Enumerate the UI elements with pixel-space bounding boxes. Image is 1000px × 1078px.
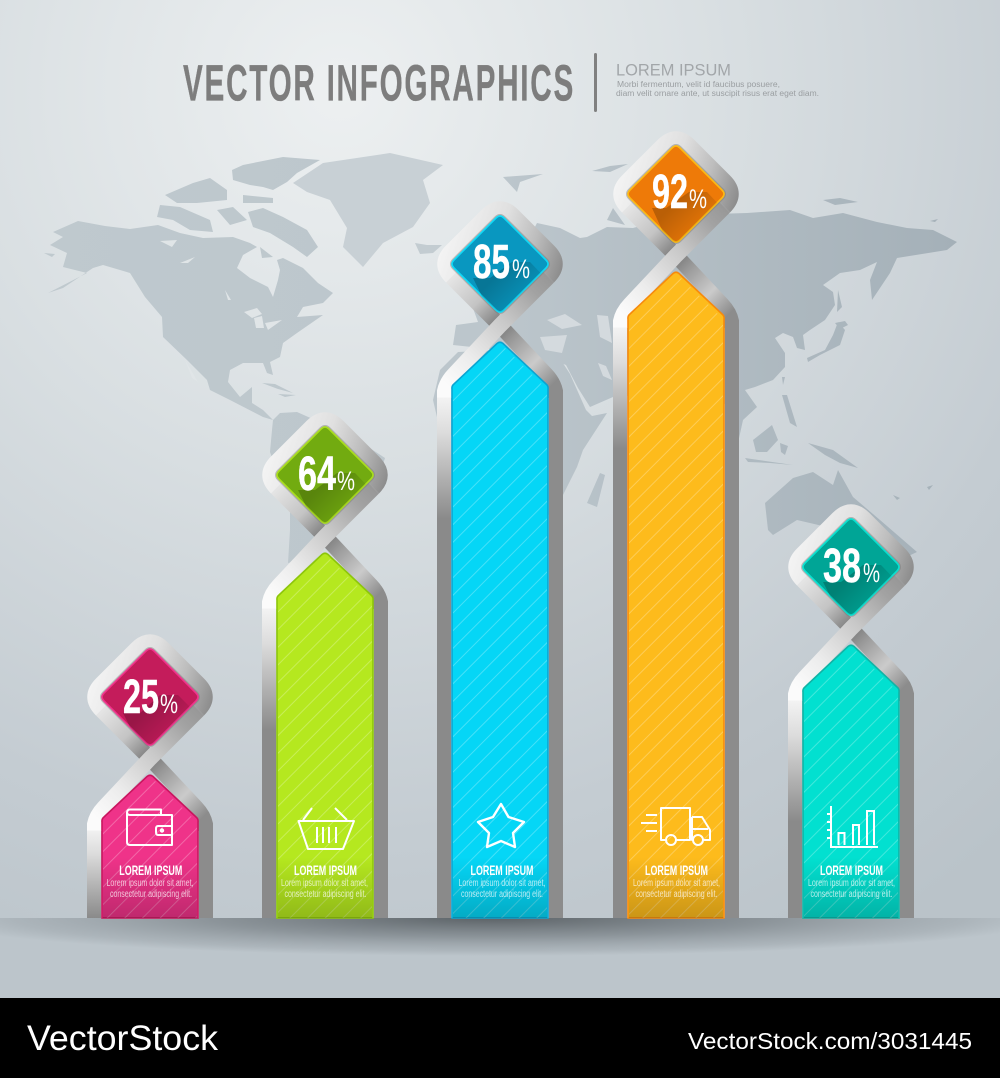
icon: star xyxy=(478,804,524,847)
bar: 64% green xyxy=(269,420,405,918)
subtitle block: diam velit ornare ante, ut suscipit risus erat eget diam. xyxy=(616,89,819,98)
ribbon frame xyxy=(269,420,381,918)
asia pacific islands xyxy=(503,164,938,560)
icon: truck xyxy=(641,808,710,845)
icon: bar chart xyxy=(827,806,878,847)
percent badge: % xyxy=(160,689,178,719)
footer url: VectorStock.com/3031445 xyxy=(688,1028,972,1054)
ribbon frame xyxy=(94,642,206,918)
bar: 25% pink xyxy=(94,642,230,918)
percent badge: 85 xyxy=(473,236,510,289)
percent badge: % xyxy=(512,254,530,284)
label: LOREM IPSUM xyxy=(470,862,534,878)
column xyxy=(102,775,198,918)
label: Lorem ipsum dolor sit amet, xyxy=(106,878,194,889)
icon: wallet xyxy=(127,810,172,845)
ribbon frame xyxy=(620,139,732,918)
map inland seas xyxy=(540,314,612,380)
label: Lorem ipsum dolor sit amet, xyxy=(633,878,720,889)
percent badge: 38 xyxy=(823,540,861,593)
iceland xyxy=(415,243,442,254)
eurasia xyxy=(453,210,957,443)
label xyxy=(458,862,546,900)
greenland xyxy=(293,153,443,267)
percent badge xyxy=(801,517,901,617)
label: consectetur adipiscing elit. xyxy=(110,889,192,900)
percent badge: 92 xyxy=(652,166,688,219)
ribbon frame xyxy=(444,209,556,918)
subtitle block: LOREM IPSUM xyxy=(616,61,731,80)
label xyxy=(106,862,194,900)
north america xyxy=(48,221,333,420)
column xyxy=(628,272,724,918)
africa xyxy=(433,350,607,520)
label: Lorem ipsum dolor sit amet, xyxy=(458,878,546,889)
footer logo: VectorStock xyxy=(27,1019,219,1058)
percent badge: 64 xyxy=(298,448,336,501)
percent badge: % xyxy=(337,466,355,496)
icon: basket xyxy=(298,808,354,849)
floor xyxy=(0,918,1000,998)
label xyxy=(633,862,720,900)
label: Lorem ipsum dolor sit amet, xyxy=(808,878,895,889)
bar: 92% orange xyxy=(620,139,756,918)
floor shadow xyxy=(0,918,1000,954)
column xyxy=(452,342,548,918)
percent badge xyxy=(626,144,726,244)
bar: 38% teal xyxy=(795,512,931,918)
percent badge: 25 xyxy=(123,671,159,724)
label: consectetur adipiscing elit. xyxy=(810,889,892,900)
ribbon frame xyxy=(795,512,907,918)
label: LOREM IPSUM xyxy=(294,862,357,878)
percent badge: % xyxy=(863,558,880,588)
label: LOREM IPSUM xyxy=(645,862,708,878)
label: LOREM IPSUM xyxy=(820,862,883,878)
label: consectetur adipiscing elit. xyxy=(636,889,718,900)
world map xyxy=(44,153,957,563)
label xyxy=(281,862,368,900)
percent badge: % xyxy=(689,184,707,214)
percent badge xyxy=(275,425,375,525)
south america xyxy=(270,412,385,563)
subtitle block: Morbi fermentum, velit id faucibus posuere, xyxy=(617,80,780,89)
label: consectetur adipiscing elit. xyxy=(284,889,366,900)
percent badge xyxy=(450,214,550,314)
arctic and caribbean islands xyxy=(44,157,320,397)
title divider xyxy=(594,53,597,112)
label: Lorem ipsum dolor sit amet, xyxy=(281,878,368,889)
label xyxy=(808,862,895,900)
label: consectetur adipiscing elit. xyxy=(461,889,543,900)
title: VECTOR INFOGRAPHICS xyxy=(183,54,575,112)
column xyxy=(803,645,899,918)
footer bar xyxy=(0,998,1000,1078)
column xyxy=(277,553,373,918)
subtitle block xyxy=(616,61,819,98)
bar: 85% blue xyxy=(444,209,580,918)
percent badge xyxy=(100,647,200,747)
label: LOREM IPSUM xyxy=(119,862,182,878)
